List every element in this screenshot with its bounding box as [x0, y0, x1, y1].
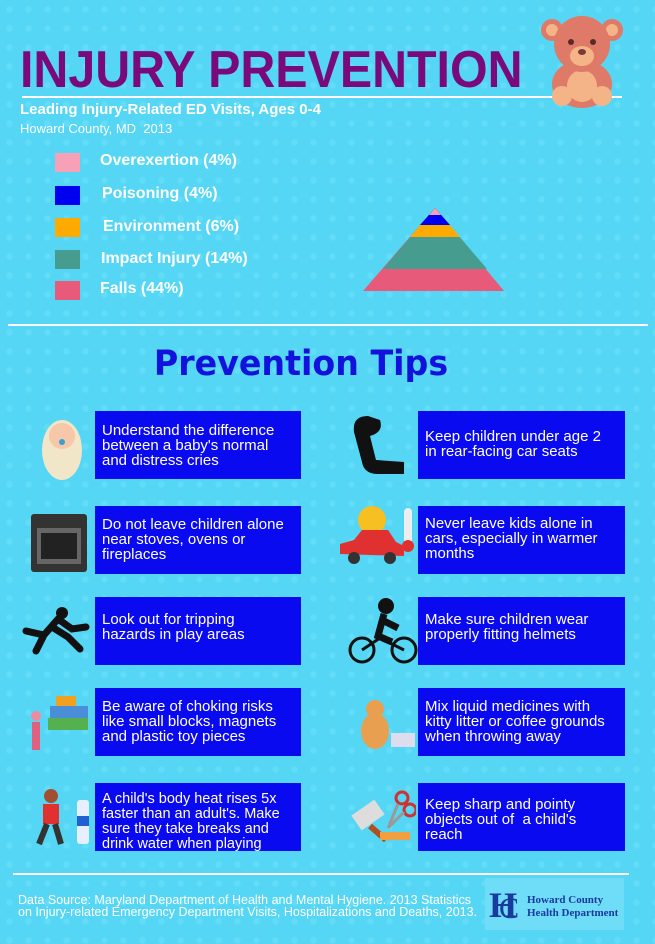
legend: Poisoning (4%)	[102, 185, 218, 202]
text: Do not leave children alone near stoves, ovens or fireplaces	[102, 516, 284, 563]
legend: Falls (44%)	[100, 280, 184, 297]
tip boxes right: Keep children under age 2 in rear-facing car seats	[425, 428, 601, 460]
legend: Overexertion (4%)	[100, 152, 237, 169]
text: Howard County, MD 2013	[20, 121, 172, 136]
title: INJURY PREVENTION	[20, 41, 523, 99]
tip boxes left: Understand the difference between a baby's normal and distress cries	[102, 422, 274, 469]
footer source	[18, 893, 477, 919]
text: Look out for tripping hazards in play areas	[102, 611, 245, 643]
footer source: on Injury-related Emergency Department Visits, Hospitalizations and Deaths, 2013.	[18, 905, 477, 919]
logo	[485, 878, 624, 930]
logo: Howard County	[527, 894, 603, 906]
icon: toys	[31, 696, 88, 750]
text: A child's body heat rises 5x faster than an adult's. Make sure they take breaks and drink water when playing	[102, 791, 280, 852]
legend: Environment (6%)	[103, 218, 239, 235]
icon: child with water	[36, 789, 89, 846]
icon: bike helmet child	[348, 598, 418, 664]
text: Keep sharp and pointy objects out of a child's reach	[425, 796, 576, 843]
icon: hot car	[340, 506, 414, 564]
icon: scissors knife	[352, 790, 416, 842]
icon: falling person	[22, 607, 90, 654]
logo: H	[489, 885, 517, 925]
logo: Health Department	[527, 907, 618, 919]
icon: teddy bear	[541, 16, 623, 108]
icon: baby	[42, 420, 82, 480]
logo: C	[499, 892, 519, 925]
text: Be aware of choking risks like small blocks, magnets and plastic toy pieces	[102, 698, 276, 745]
icon: cat litter	[361, 700, 415, 749]
tip boxes right	[418, 411, 625, 479]
heading: prevention tips: Prevention Tips	[154, 344, 448, 384]
text: Make sure children wear properly fitting helmets	[425, 611, 588, 643]
icon: stove	[31, 514, 87, 572]
legend: Impact Injury (14%)	[101, 250, 248, 267]
legend	[55, 152, 248, 300]
text: Never leave kids alone in cars, especially in warmer months	[425, 515, 598, 562]
pyramid chart	[363, 208, 504, 291]
footer source: Data Source: Maryland Department of Health and Mental Hygiene. 2013 Statistics	[18, 893, 471, 907]
subtitle: Leading Injury-Related ED Visits, Ages 0-4	[20, 101, 321, 118]
text: Mix liquid medicines with kitty litter or coffee grounds when throwing away	[425, 698, 605, 745]
icon: car seat	[354, 416, 404, 474]
tip boxes left	[95, 411, 301, 479]
